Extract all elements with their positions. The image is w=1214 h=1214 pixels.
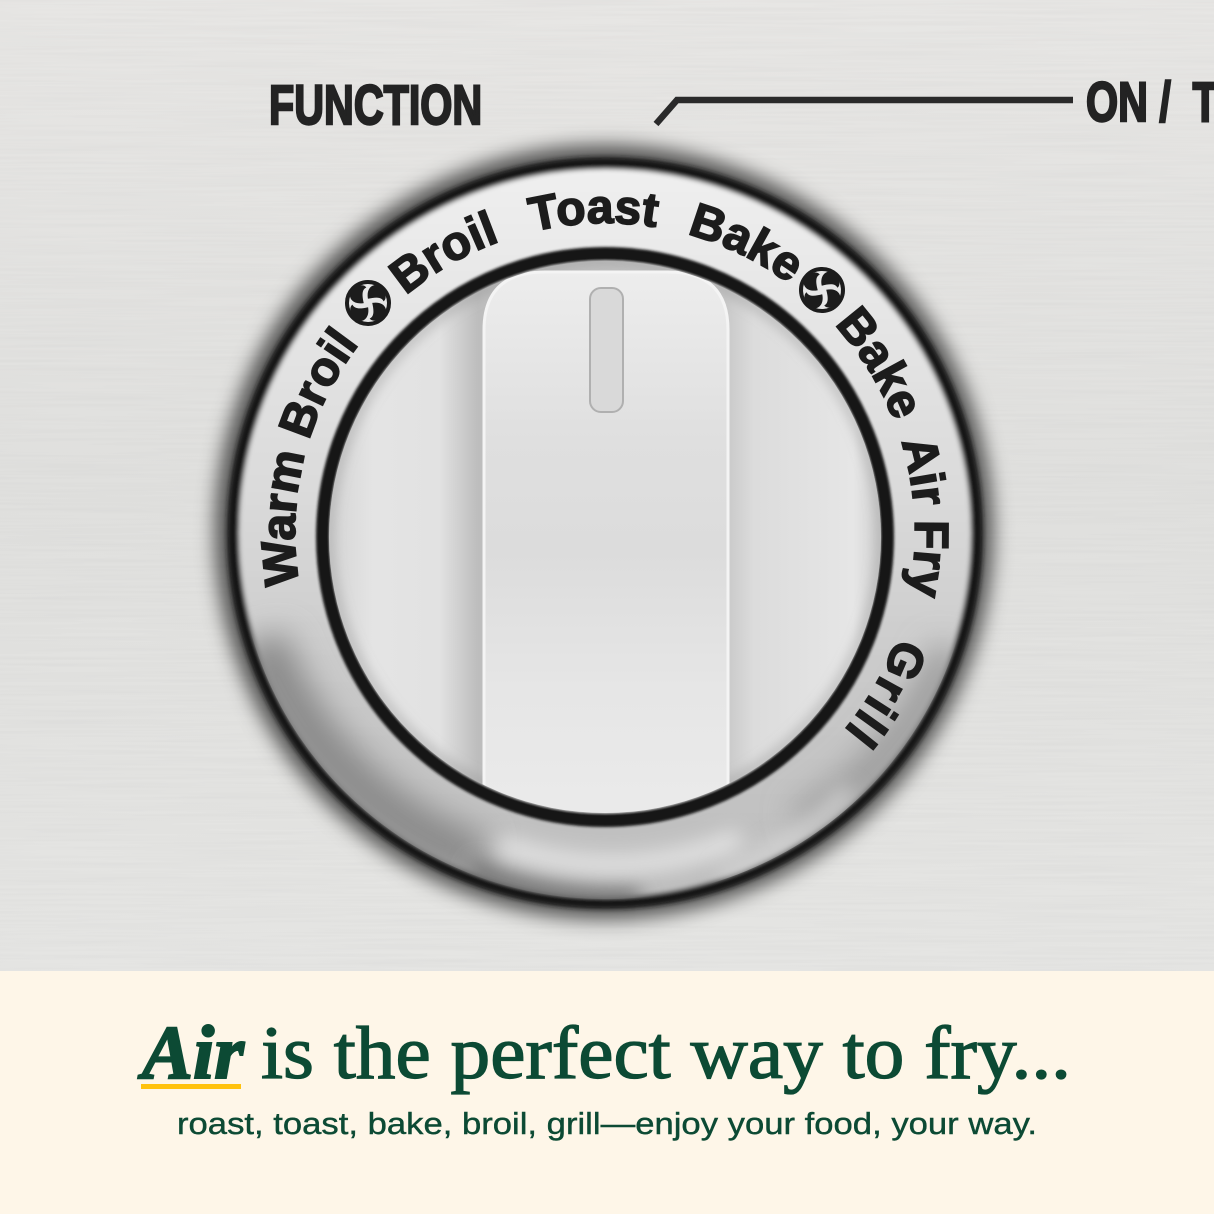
dial label: Warm Broil: Warm Broil [260,325,358,588]
dial label: convection Bake: Bake [836,304,915,418]
icon: convection fan left [338,273,398,333]
soft shadow halo around bezel [228,158,980,906]
grip slot indicator [590,288,623,412]
bezel ring [233,163,977,903]
headline [138,1011,1071,1095]
dial label: Broil: Broil [387,208,498,294]
subheading: roast, toast, bake, broil, grill—enjoy your food, your way. [177,1106,1037,1141]
function dial [200,130,1008,934]
knob edge shade [329,261,881,813]
dial label: Toast: Toast [526,192,660,230]
dial label: Bake: Bake [688,202,800,280]
knob grip [484,272,728,830]
knob body [329,261,881,830]
dial label: Grill: Grill [845,642,924,751]
headline text: is the perfect way to fry... [261,1012,1071,1095]
dial label: Air Fry: Air Fry [900,442,949,600]
label: FUNCTION: FUNCTION [269,74,482,137]
headline emphasis: Air: Air [138,1011,245,1095]
caption panel [0,971,1214,1214]
label: ON / T cropped at the right edge: ON / T [1086,71,1214,134]
icon: convection fan right [792,260,852,320]
knob disc [329,261,881,813]
yellow underline [141,1084,241,1089]
inner dark groove [323,254,887,820]
indicator line [656,100,1073,124]
dial function labels [260,192,949,751]
